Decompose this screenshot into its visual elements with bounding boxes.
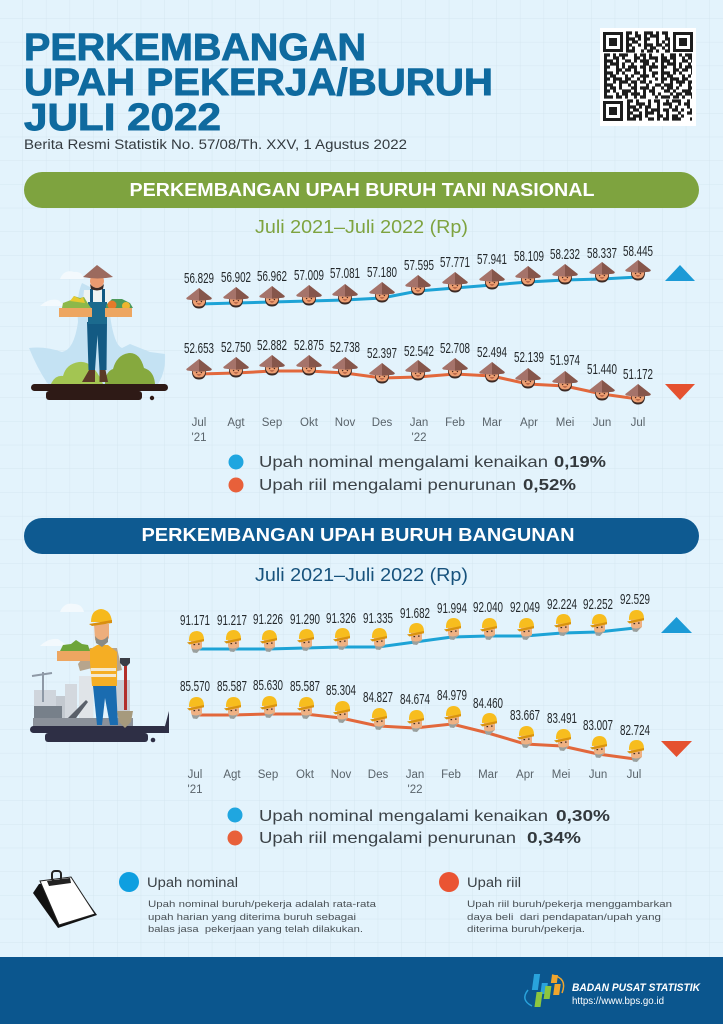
month axis: section 1: '21 [192,432,206,444]
definition: nominal wage: Upah nominal [147,875,238,890]
values: construction real wage: 85.304 [326,682,356,699]
definition: real wage: Upah riil [467,875,521,890]
month axis: section 1: Agt [227,417,245,429]
month axis: section 1: Okt [300,417,319,429]
definition: real wage: Upah riil buruh/pekerja menggambarkan [467,899,672,910]
title: UPAH PEKERJA/BURUH [24,62,493,104]
QR code [600,28,696,126]
month axis: section 1: Jun [593,417,611,429]
month axis: section 2: Jul [627,769,641,781]
values: construction nominal wage: 91.290 [290,611,320,628]
legend: section 2: Upah nominal mengalami kenaikan [259,808,548,825]
values: construction nominal wage: 91.326 [326,610,356,627]
month axis: section 2: Jan [406,769,424,781]
values: construction real wage: 83.491 [547,710,577,727]
values: farm real wage: 51.440 [587,361,617,378]
legend: section 2 [228,808,610,847]
values: farm real wage: 52.542 [404,343,434,360]
definition: real wage [439,872,672,935]
farmer head markers: real [186,355,651,404]
definition: real wage: daya beli dari pendapatan/upah yang [467,912,661,923]
chart: construction real wage line [198,714,635,759]
month axis: section 2: Feb [441,769,461,781]
month axis: section 2: Jul [188,769,202,781]
values: construction real wage: 83.667 [510,707,540,724]
section 1 header bar: PERKEMBANGAN UPAH BURUH TANI NASIONAL [130,180,594,200]
legend: section 2: 0,30% [556,808,610,825]
values: construction nominal wage: 92.224 [547,596,577,613]
legend: section 1: 0,52% [523,477,576,494]
chart: farm real wage line [199,371,638,399]
values: construction nominal wage [180,591,650,629]
month axis: section 1 [192,417,645,444]
values: construction real wage: 85.587 [290,678,320,695]
month axis: section 1: '22 [412,432,426,444]
month axis: section 2: Mei [552,769,570,781]
values: farm nominal wage: 57.771 [440,254,470,271]
values: construction nominal wage: 92.040 [473,599,503,616]
values: construction real wage: 82.724 [620,722,650,739]
arrow: real down [665,384,695,400]
values: construction real wage: 84.979 [437,687,467,704]
values: farm real wage: 52.397 [367,345,397,362]
logo: Badan Pusat Statistik [525,974,701,1007]
values: farm nominal wage [184,243,653,287]
chart: construction nominal wage line [198,628,635,649]
month axis: section 2: Des [368,769,388,781]
section 1 header bar [24,172,699,208]
values: construction real wage [180,677,650,739]
month axis: section 2: '21 [188,784,202,796]
values: construction nominal wage: 91.994 [437,600,467,617]
title [24,27,493,139]
values: farm real wage: 51.974 [550,352,580,369]
month axis: section 2: Apr [516,769,534,781]
arrow: real down, section 2 [661,741,692,757]
values: farm nominal wage: 56.902 [221,269,251,286]
values: farm nominal wage: 58.232 [550,246,580,263]
month axis: section 2: Jun [589,769,607,781]
values: construction nominal wage: 91.217 [217,612,247,629]
illustration: construction worker [30,604,169,742]
values: farm real wage: 52.882 [257,337,287,354]
section 2 period heading: Juli 2021–Juli 2022 (Rp) [255,565,468,585]
month axis: section 2: Okt [296,769,315,781]
legend: section 2: 0,34% [527,830,581,847]
legend: section 1 [228,454,606,494]
month axis: section 2: Nov [331,769,351,781]
values: farm real wage [184,337,653,383]
month axis: section 1: Sep [262,417,282,429]
worker head markers: nominal [187,610,644,653]
values: farm real wage: 52.708 [440,340,470,357]
values: construction nominal wage: 92.252 [583,596,613,613]
title: PERKEMBANGAN [24,27,366,69]
values: farm nominal wage: 58.109 [514,248,544,265]
values: farm nominal wage: 57.180 [367,264,397,281]
values: farm real wage: 52.139 [514,349,544,366]
values: construction real wage: 84.460 [473,695,503,712]
values: farm nominal wage: 57.595 [404,257,434,274]
values: farm real wage: 52.875 [294,337,324,354]
legend: section 2: Upah riil mengalami penurunan [259,830,516,847]
title: JULI 2022 [24,97,221,139]
values: farm real wage: 52.738 [330,339,360,356]
chart: farm nominal wage line [199,277,638,304]
values: farm nominal wage: 57.941 [477,251,507,268]
values: construction nominal wage: 92.049 [510,599,540,616]
section 2 header bar [24,518,699,554]
definition: nominal wage: balas jasa pekerjaan yang telah dilakukan. [148,924,363,935]
definition: nominal wage [119,872,377,935]
values: farm real wage: 52.494 [477,344,507,361]
month axis: section 1: Mar [482,417,502,429]
legend: section 1: 0,19% [554,454,606,471]
logo: Badan Pusat Statistik: BADAN PUSAT STATISTIK [572,982,701,994]
values: farm real wage: 52.653 [184,340,214,357]
section 2 header bar: PERKEMBANGAN UPAH BURUH BANGUNAN [142,525,574,545]
arrow: nominal up [665,265,695,281]
month axis: section 2 [188,769,641,796]
values: construction nominal wage: 92.529 [620,591,650,608]
legend: section 1: Upah riil mengalami penurunan [259,477,516,494]
values: farm nominal wage: 57.081 [330,265,360,282]
values: farm real wage: 51.172 [623,366,653,383]
values: construction real wage: 85.587 [217,678,247,695]
values: construction real wage: 84.674 [400,691,430,708]
values: farm nominal wage: 56.829 [184,270,214,287]
values: construction nominal wage: 91.171 [180,612,210,629]
definition: real wage: diterima buruh/pekerja. [467,924,585,935]
icon: clipboard [33,871,97,928]
month axis: section 1: Des [372,417,392,429]
values: farm real wage: 52.750 [221,339,251,356]
worker head markers: real [187,696,644,762]
definition: nominal wage: Upah nominal buruh/pekerja adalah rata-rata [148,899,377,910]
month axis: section 1: Jul [631,417,645,429]
values: construction nominal wage: 91.226 [253,611,283,628]
month axis: section 1: Jul [192,417,206,429]
values: construction nominal wage: 91.335 [363,610,393,627]
month axis: section 1: Mei [556,417,574,429]
arrow: nominal up, section 2 [661,617,692,633]
values: farm nominal wage: 57.009 [294,267,324,284]
month axis: section 1: Nov [335,417,355,429]
values: construction real wage: 84.827 [363,689,393,706]
month axis: section 2: Agt [223,769,241,781]
month axis: section 1: Apr [520,417,538,429]
legend: section 1: Upah nominal mengalami kenaikan [259,454,548,471]
values: construction real wage: 85.630 [253,677,283,694]
footer band [0,957,723,1024]
month axis: section 1: Feb [445,417,465,429]
section 1 period heading: Juli 2021–Juli 2022 (Rp) [255,217,468,237]
month axis: section 2: Mar [478,769,498,781]
definition: nominal wage: upah harian yang diterima buruh sebagai [148,912,356,923]
month axis: section 2: '22 [408,784,422,796]
values: farm nominal wage: 56.962 [257,268,287,285]
month axis: section 2: Sep [258,769,278,781]
values: farm nominal wage: 58.445 [623,243,653,260]
values: farm nominal wage: 58.337 [587,245,617,262]
values: construction nominal wage: 91.682 [400,605,430,622]
subtitle: publication reference: Berita Resmi Statistik No. 57/08/Th. XXV, 1 Agustus 2022 [24,137,407,152]
logo: Badan Pusat Statistik: https://www.bps.go.id [572,995,664,1007]
farmer head markers: nominal [186,260,651,308]
values: construction real wage: 85.570 [180,678,210,695]
month axis: section 1: Jan [410,417,428,429]
illustration: farmer [29,265,168,400]
values: construction real wage: 83.007 [583,717,613,734]
